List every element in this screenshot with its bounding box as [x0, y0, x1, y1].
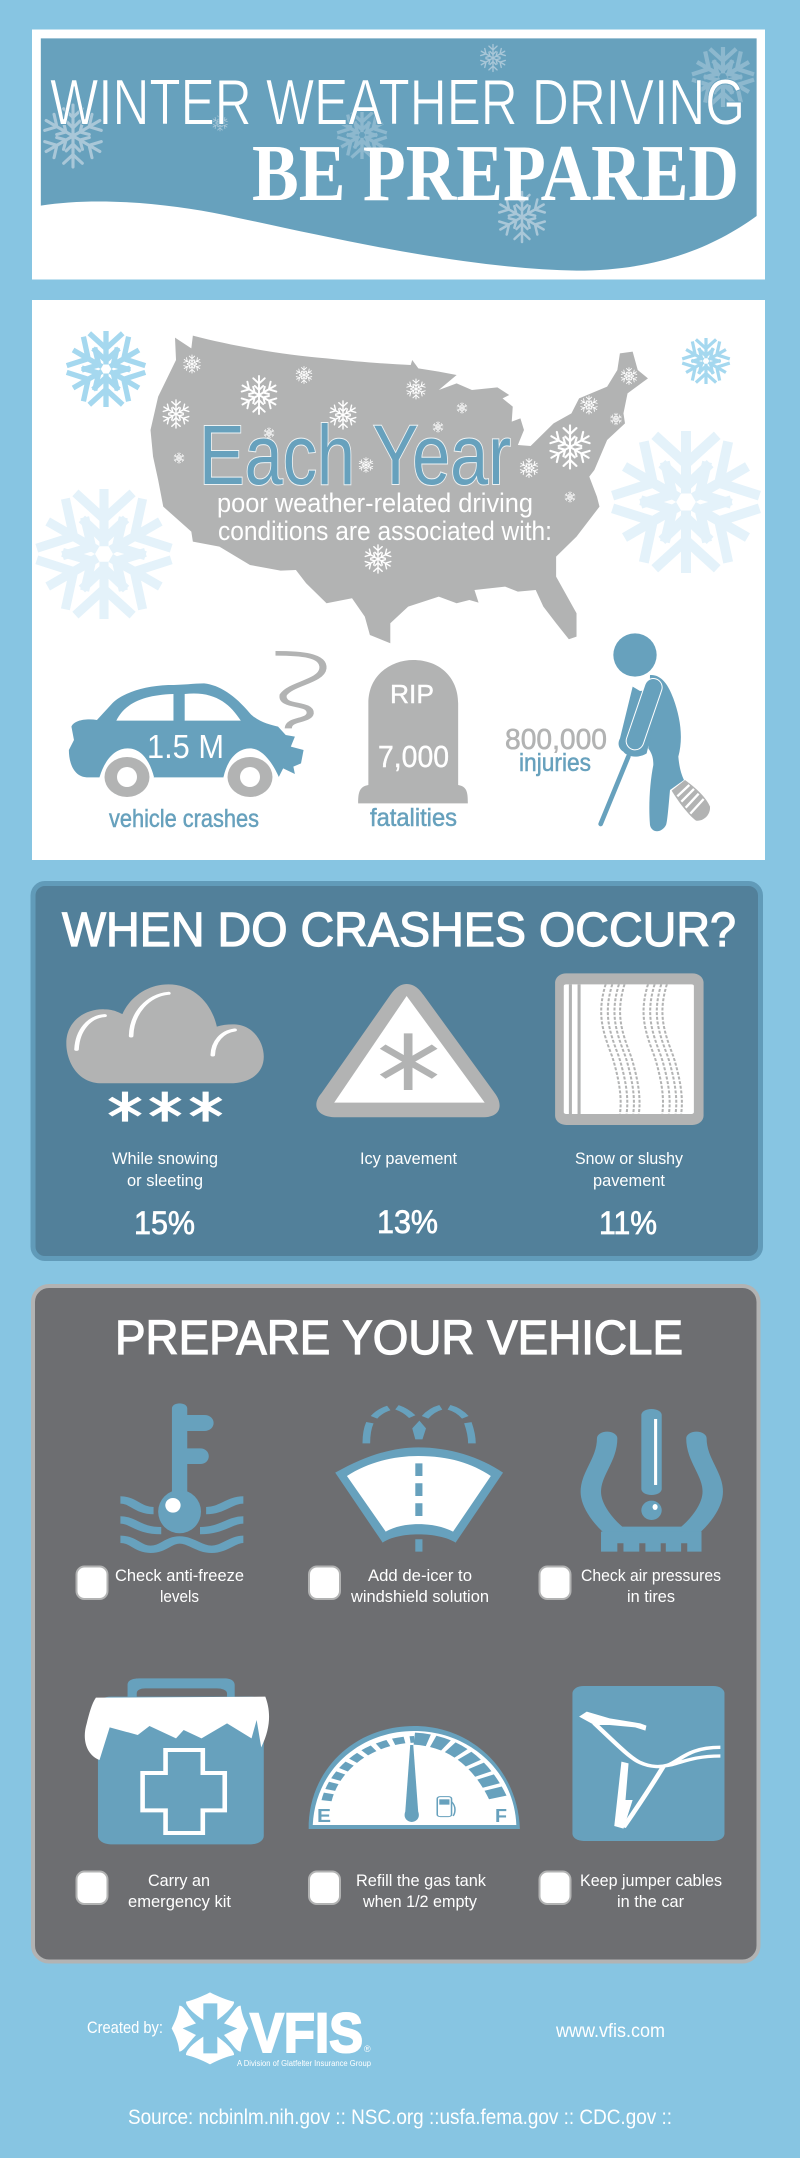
icon: fuel gauge — [309, 1726, 520, 1829]
text: created by: Created by: — [87, 2018, 163, 2037]
icon: tire pressure warning — [591, 1409, 713, 1552]
title line 2: BE PREPARED — [252, 130, 739, 218]
text: add de-icer: Add de-icer to — [368, 1566, 472, 1585]
checkbox: refill gas tank — [309, 1872, 340, 1904]
text: intro sentence: poor weather-related driving — [217, 488, 533, 518]
text: jumper cables — [580, 1871, 722, 1911]
checkbox: jumper cables — [540, 1872, 570, 1904]
text: snow or slushy column — [575, 1149, 683, 1241]
heading: each year: Each Year — [199, 408, 511, 502]
text: refill gas tank — [356, 1871, 486, 1911]
heading: when do crashes occur: WHEN DO CRASHES OCCUR? — [62, 904, 736, 957]
text: while snowing column: While snowing — [112, 1149, 218, 1168]
banner blue wave — [41, 38, 757, 271]
text: jumper cables: Keep jumper cables — [580, 1871, 722, 1890]
text: add de-icer — [350, 1566, 489, 1606]
text: RIP: RIP — [390, 679, 434, 709]
text: vehicle crashes label: vehicle crashes — [109, 805, 259, 833]
text: emergency kit — [128, 1871, 231, 1911]
text: fatalities label: fatalities — [370, 804, 457, 832]
text: logo tagline: A Division of Glatfelter Insurance Group — [237, 2059, 372, 2068]
text: check anti-freeze — [115, 1566, 244, 1606]
text: check air pressures: Check air pressures — [581, 1566, 721, 1585]
icon: jumper cables — [572, 1686, 724, 1841]
text: intro sentence — [217, 488, 552, 546]
icon: VFIS emblem — [172, 1992, 248, 2064]
panel: each year statistics — [32, 300, 765, 860]
checkbox: check air pressures — [540, 1566, 570, 1599]
text: while snowing column: or sleeting — [127, 1171, 203, 1190]
icon: emergency kit with snow — [85, 1678, 269, 1844]
text: while snowing column — [112, 1149, 218, 1241]
stat: 15 percent: 15% — [134, 1205, 195, 1241]
text: snow or slushy column: pavement — [593, 1171, 665, 1190]
icon: gravestone — [358, 660, 468, 803]
checkbox: check anti-freeze — [76, 1566, 108, 1599]
icon: snow cloud — [66, 984, 264, 1122]
panel: header banner — [32, 30, 765, 280]
icon: crashed car with smoke — [69, 653, 323, 797]
icon: white snowflakes on map — [162, 355, 638, 573]
text: refill gas tank: Refill the gas tank — [356, 1871, 486, 1890]
footer — [87, 1992, 672, 2129]
text: sources: Source: ncbinlm.nih.gov :: NSC.org ::usfa.fema.gov :: CDC.gov :: — [128, 2106, 672, 2129]
text: refill gas tank: when 1/2 empty — [362, 1892, 477, 1911]
panel: prepare your vehicle — [33, 1286, 758, 1962]
text: emergency kit: emergency kit — [128, 1892, 231, 1911]
text: check anti-freeze: Check anti-freeze — [115, 1566, 244, 1585]
logo: VFIS — [172, 1992, 372, 2068]
stat: injuries count: 800,000 — [505, 724, 607, 756]
text: emergency kit: Carry an — [148, 1871, 210, 1890]
icon: tire tracks in snow — [555, 973, 704, 1125]
text: add de-icer: windshield solution — [350, 1587, 489, 1606]
stat: 11 percent: 11% — [599, 1205, 657, 1241]
text: intro sentence: conditions are associated with: — [218, 516, 552, 546]
text: gauge full mark: F — [495, 1806, 507, 1826]
icon: windshield washer — [335, 1407, 503, 1552]
text: check air pressures — [581, 1566, 721, 1606]
checkbox: emergency kit — [76, 1872, 108, 1904]
text: icy pavement column — [360, 1149, 457, 1240]
heading: prepare your vehicle: PREPARE YOUR VEHICLE — [115, 1312, 683, 1365]
stat: fatalities count: 7,000 — [378, 739, 449, 774]
icon: coolant temperature — [120, 1403, 243, 1549]
text: injuries label: injuries — [519, 749, 591, 777]
icon: icy road warning sign — [316, 984, 500, 1117]
checkbox: add de-icer — [309, 1566, 340, 1599]
text: icy pavement column: Icy pavement — [360, 1149, 457, 1168]
text: check anti-freeze: levels — [160, 1587, 199, 1606]
icon: person on crutch — [601, 633, 710, 831]
banner snowflakes — [42, 44, 756, 242]
text: snow or slushy column: Snow or slushy — [575, 1149, 683, 1168]
stat: 13 percent: 13% — [377, 1204, 438, 1240]
icon: pale and light blue snowflakes — [33, 331, 763, 619]
text: check air pressures: in tires — [627, 1587, 675, 1606]
text: gauge empty mark: E — [317, 1806, 331, 1826]
panel: when do crashes occur — [33, 884, 760, 1258]
stat: vehicle crashes count: 1.5 M — [147, 728, 224, 765]
text: website: www.vfis.com — [555, 2021, 665, 2042]
text: registered mark: ® — [364, 2044, 371, 2054]
text: VFIS wordmark: VFIS — [250, 2001, 363, 2064]
text: jumper cables: in the car — [617, 1892, 684, 1911]
map of the United States — [151, 336, 648, 643]
